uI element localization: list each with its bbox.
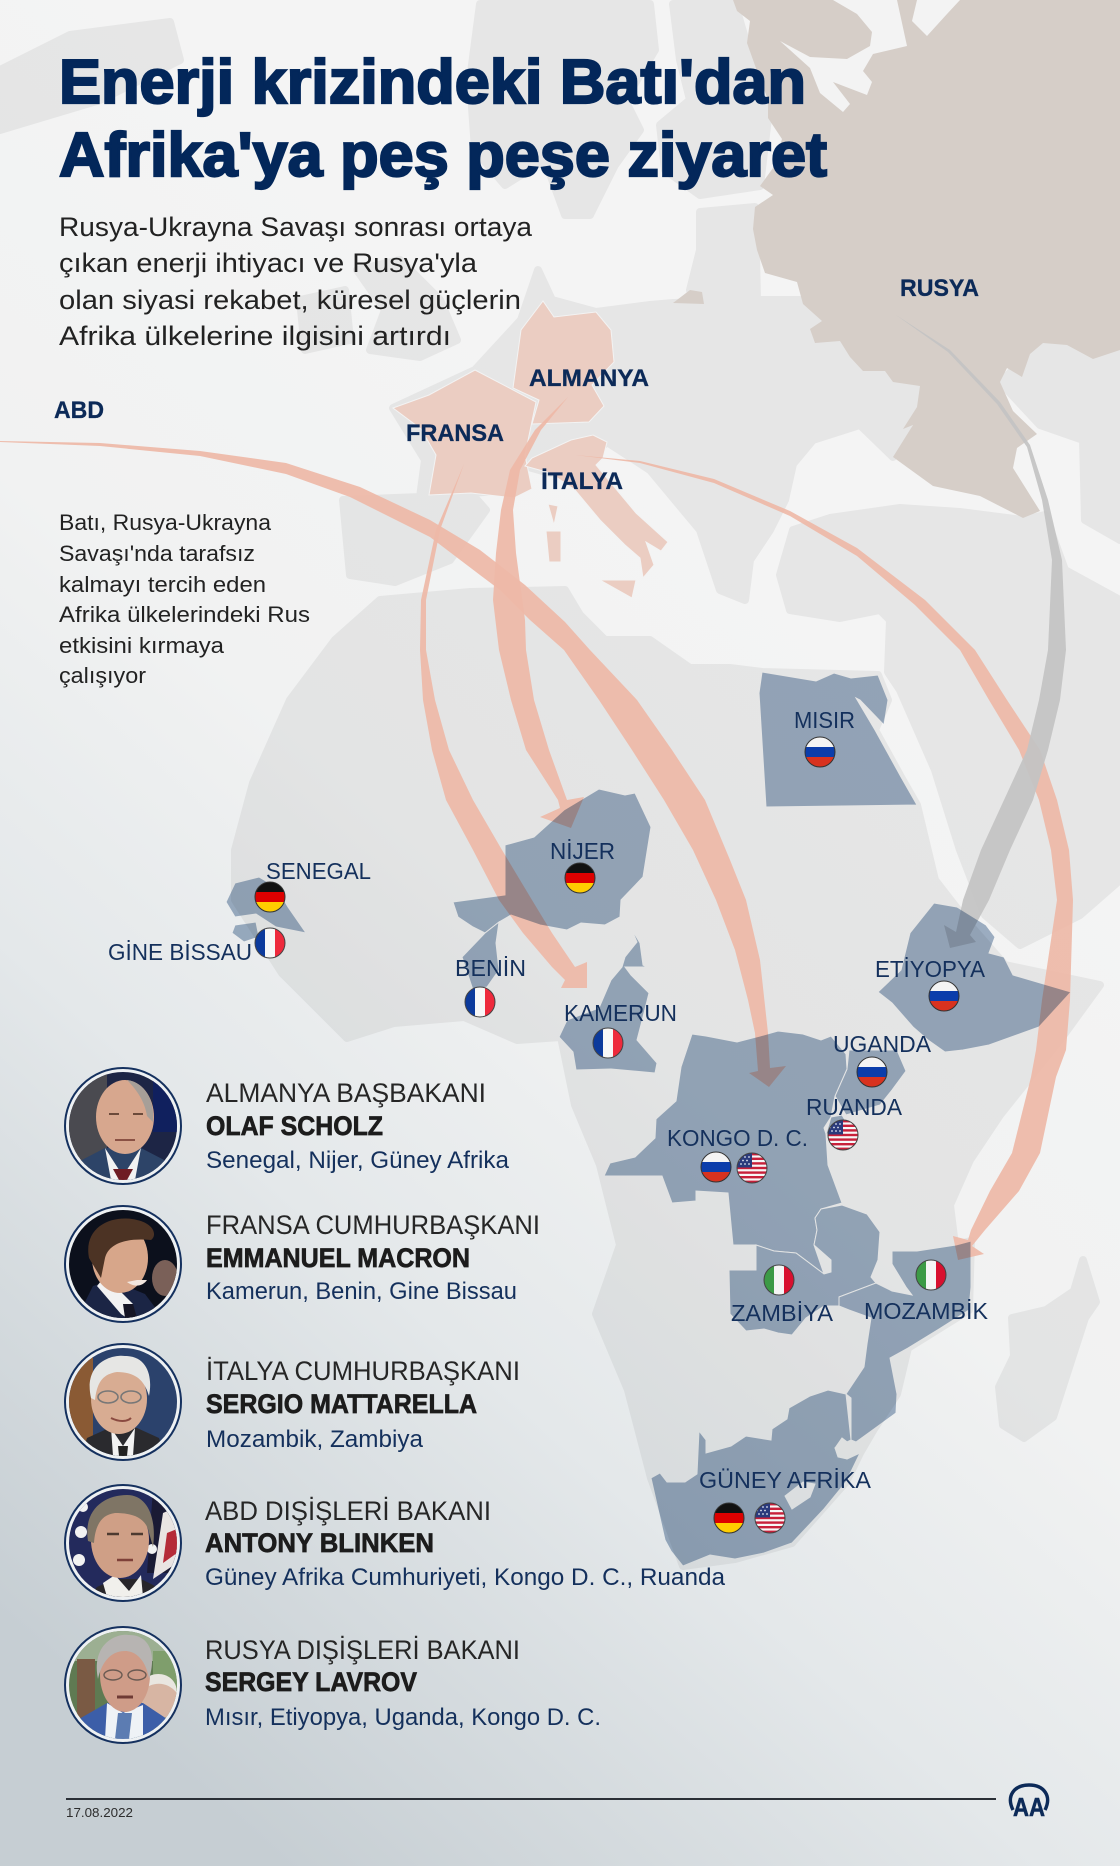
South Africa (651, 1390, 860, 1566)
visited country labels: GİNE BİSSAU (108, 939, 252, 965)
visited country labels: MOZAMBİK (864, 1298, 989, 1324)
arrow: Fransa to Kamerun (420, 464, 587, 988)
name: OLAF SCHOLZ (206, 1111, 383, 1141)
Niger (453, 789, 651, 933)
intro text: çıkan enerji ihtiyacı ve Rusya'yla (59, 248, 478, 278)
visited country labels: SENEGAL (266, 858, 371, 884)
title: Afrika'ya peş peşe ziyaret (59, 121, 827, 190)
visiting country labels: FRANSA (406, 420, 504, 447)
date: 17.08.2022 (66, 1805, 133, 1820)
Corsica (548, 504, 558, 525)
person: Emmanuel Macron (65, 1206, 540, 1322)
visited country labels (108, 707, 989, 1493)
visited countries: Kamerun, Benin, Gine Bissau (206, 1278, 517, 1305)
portrait: Blinken (65, 1485, 181, 1601)
intro text (59, 212, 533, 351)
White Sea inlet (780, 0, 907, 112)
role: ABD DIŞİŞLERİ BAKANI (205, 1495, 491, 1526)
flag: Zambiya Italy (763, 1264, 795, 1296)
Cameroon (559, 928, 657, 1073)
visited country labels: RUANDA (806, 1094, 903, 1120)
Kaliningrad (673, 290, 704, 304)
name: SERGIO MATTARELLA (206, 1389, 477, 1419)
visited countries: Güney Afrika Cumhuriyeti, Kongo D. C., Ruanda (205, 1564, 726, 1591)
arrows of visits (0, 315, 1073, 1260)
logo: AA: AA (1013, 1792, 1045, 1822)
side note: etkisini kırmaya (59, 633, 225, 658)
visiting country labels: ABD (54, 397, 104, 424)
visited country labels: BENİN (455, 955, 526, 981)
intro text: olan siyasi rekabet, küresel güçlerin (59, 285, 521, 315)
Russia shape (733, 0, 1120, 518)
role: FRANSA CUMHURBAŞKANI (206, 1210, 540, 1240)
flag: Senegal Germany (254, 881, 286, 913)
Italy (525, 435, 668, 578)
flag: Nijer Germany (564, 862, 596, 894)
visited country labels: ETİYOPYA (875, 956, 986, 982)
name: ANTONY BLINKEN (205, 1528, 434, 1558)
arrow: Rusya to Etiyopya (896, 315, 1066, 948)
person: Sergio Mattarella (65, 1344, 520, 1460)
intro text: Rusya-Ukrayna Savaşı sonrası ortaya (59, 212, 533, 242)
visiting country labels: RUSYA (900, 275, 979, 302)
flag: Etiyopya Russia (928, 980, 960, 1012)
side note: Afrika ülkelerindeki Rus (59, 602, 310, 627)
Mozambique (839, 1241, 971, 1442)
Germany (513, 301, 614, 424)
flag: Güney Afrika Germany (713, 1502, 745, 1534)
Ethiopia (878, 903, 1071, 1052)
arrow: İtalya to Mozambik (575, 455, 1073, 1260)
visited countries: Senegal, Nijer, Güney Afrika (206, 1147, 510, 1174)
Zambia (729, 1205, 880, 1335)
visited country labels: GÜNEY AFRİKA (699, 1467, 872, 1493)
side note: kalmayı tercih eden (59, 572, 266, 597)
title: Enerji krizindeki Batı'dan (59, 48, 806, 117)
side note (59, 510, 310, 688)
portrait: Lavrov (65, 1627, 181, 1743)
flag: Uganda Russia (856, 1056, 888, 1088)
intro text: Afrika ülkelerine ilgisini artırdı (59, 321, 451, 351)
visiting country labels: ALMANYA (529, 365, 649, 392)
title (59, 48, 827, 190)
visited country labels: MISIR (794, 707, 855, 733)
portrait: Mattarella (65, 1344, 181, 1460)
map: Russia highlighted (673, 0, 1120, 518)
footer rule (66, 1798, 996, 1800)
flag: Kongo Russia (700, 1151, 732, 1183)
flag: Mısır Russia (804, 736, 836, 768)
Uganda (835, 1050, 906, 1115)
flag: Ruanda USA (827, 1119, 859, 1151)
map: visited African countries (226, 672, 1071, 1566)
flag: Benin France (464, 986, 496, 1018)
visited country labels: UGANDA (833, 1031, 932, 1057)
visited country labels: KAMERUN (564, 1000, 677, 1026)
visiting country labels (54, 275, 979, 495)
side note: çalışıyor (59, 663, 146, 688)
name: SERGEY LAVROV (205, 1667, 417, 1697)
DR Congo (604, 1031, 847, 1274)
visited countries: Mozambik, Zambiya (206, 1426, 424, 1453)
arrow: Almanya to Nijer (493, 397, 584, 828)
flags on map (254, 736, 960, 1534)
person: Sergey Lavrov (65, 1627, 601, 1743)
side note: Savaşı'nda tarafsız (59, 541, 255, 566)
person: Olaf Scholz (65, 1068, 510, 1184)
role: RUSYA DIŞİŞLERİ BAKANI (205, 1634, 520, 1665)
Eswatini (835, 1438, 855, 1459)
role: İTALYA CUMHURBAŞKANI (206, 1355, 520, 1386)
visited country labels: KONGO D. C. (667, 1125, 808, 1151)
side note: Batı, Rusya-Ukrayna (59, 510, 272, 535)
flag: Güney Afrika USA (754, 1502, 786, 1534)
Barents Sea inlet (912, 0, 960, 36)
name: EMMANUEL MACRON (206, 1243, 470, 1273)
visited country labels: ZAMBİYA (731, 1300, 834, 1326)
Egypt (759, 672, 917, 807)
Benin (462, 922, 499, 990)
portrait: Macron (65, 1206, 181, 1322)
France (393, 370, 536, 498)
arrow: ABD to Kongo D. C. (0, 441, 786, 1087)
visiting country labels: İTALYA (541, 468, 623, 495)
Sardinia (546, 531, 561, 562)
Sicily (600, 580, 636, 598)
flag: Mozambik Italy (915, 1259, 947, 1291)
visited country labels: NİJER (550, 838, 615, 864)
person: Antony Blinken (65, 1485, 726, 1601)
flag: Kamerun France (592, 1027, 624, 1059)
Guinea-Bissau (232, 922, 259, 942)
flag: Gine Bissau France (254, 927, 286, 959)
role: ALMANYA BAŞBAKANI (206, 1078, 486, 1108)
Rwanda (826, 1115, 848, 1134)
Lesotho (785, 1482, 815, 1509)
Senegal (226, 877, 306, 933)
flag: Kongo USA (736, 1152, 768, 1184)
visited countries: Mısır, Etiyopya, Uganda, Kongo D. C. (205, 1704, 601, 1731)
map: visiting European countries (393, 301, 668, 598)
portrait: Scholz (65, 1068, 181, 1184)
